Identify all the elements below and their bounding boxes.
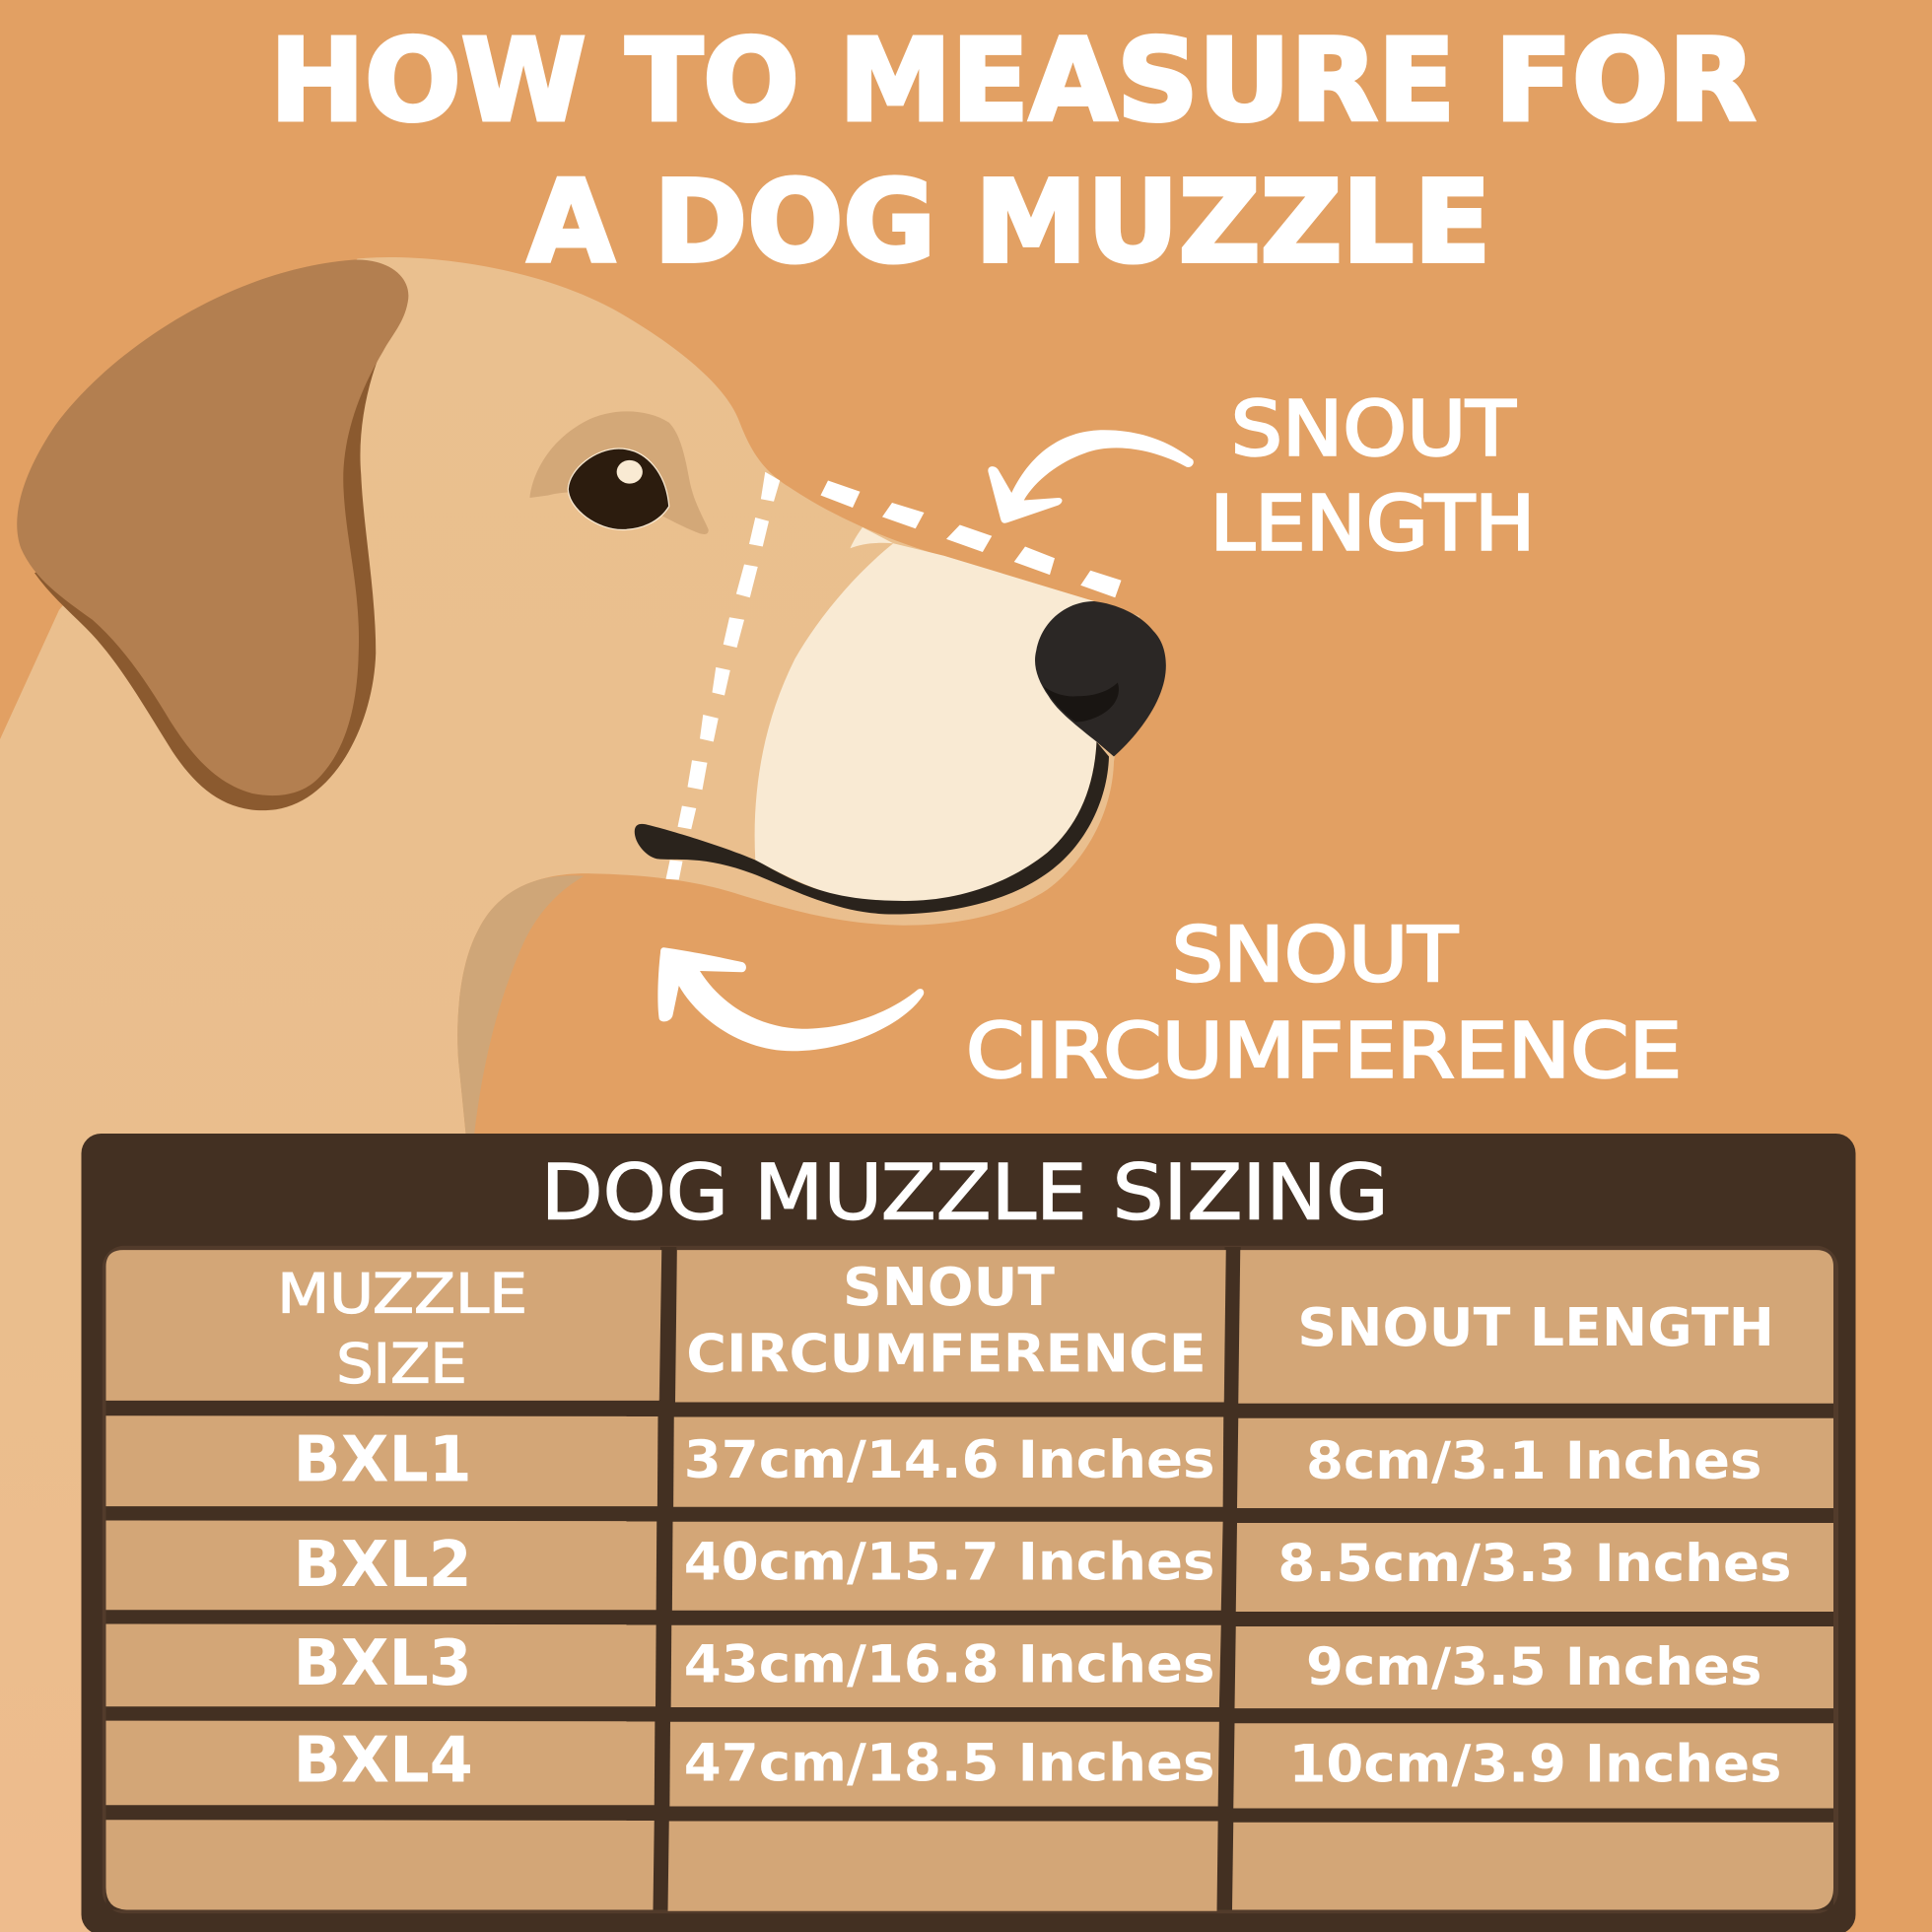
eye	[568, 448, 669, 530]
illustration: dog head in profile	[0, 257, 1166, 1932]
arrow: snout length	[988, 430, 1194, 523]
table cells	[106, 1250, 1833, 1911]
label: snout length: LENGTH	[1210, 480, 1536, 568]
ear	[17, 260, 408, 795]
label: snout circumference: CIRCUMFERENCE	[966, 1007, 1682, 1095]
header row: SNOUT	[843, 1256, 1055, 1318]
label: snout circumference	[966, 911, 1682, 1094]
label: snout length: SNOUT	[1231, 384, 1516, 472]
row: BXL1: BXL1	[294, 1423, 472, 1496]
table frame	[81, 1134, 1855, 1932]
mouth line	[635, 741, 1109, 915]
eye highlight	[617, 460, 643, 484]
row: BXL2: BXL2	[294, 1529, 472, 1602]
eye patch	[530, 411, 709, 534]
neck shadow	[457, 875, 584, 1134]
row: BXL2: 40cm/15.7 Inches	[684, 1532, 1214, 1592]
nostril shadow	[1044, 682, 1119, 722]
row: BXL4: BXL4	[294, 1724, 473, 1797]
title	[270, 15, 1756, 289]
label: snout length	[1210, 384, 1536, 568]
row: BXL1: 8cm/3.1 Inches	[1306, 1431, 1762, 1491]
label: snout circumference: SNOUT	[1172, 911, 1458, 999]
panel: sizing table	[81, 1134, 1855, 1932]
row: BXL2: 8.5cm/3.3 Inches	[1277, 1534, 1792, 1594]
title: HOW TO MEASURE FOR	[270, 15, 1756, 147]
arrow: snout circumference	[657, 947, 924, 1051]
title: A DOG MUZZLE	[527, 157, 1490, 289]
row: BXL3	[294, 1627, 1762, 1700]
row: BXL3: 43cm/16.8 Inches	[684, 1634, 1214, 1694]
row: BXL1: 37cm/14.6 Inches	[684, 1430, 1214, 1490]
row: BXL4: 10cm/3.9 Inches	[1289, 1734, 1782, 1794]
table inner edge	[103, 1246, 1838, 1913]
header row	[277, 1256, 1774, 1396]
muzzle cream patch	[755, 527, 1109, 906]
header row: CIRCUMFERENCE	[686, 1322, 1207, 1384]
table title: DOG MUZZLE SIZING	[541, 1148, 1389, 1237]
dashed line: snout circumference	[666, 472, 780, 879]
ear shadow	[34, 346, 383, 810]
header row: SIZE	[336, 1333, 467, 1396]
dashed line: snout length	[820, 481, 1122, 597]
nose	[1035, 601, 1166, 757]
row: BXL1	[294, 1423, 1762, 1496]
row: BXL2	[294, 1529, 1792, 1602]
row: BXL4	[294, 1725, 1782, 1797]
dog head and body	[0, 257, 1139, 1932]
row: BXL3: BXL3	[294, 1627, 472, 1700]
row: BXL4: 47cm/18.5 Inches	[684, 1733, 1214, 1793]
header row: SNOUT LENGTH	[1297, 1296, 1774, 1358]
header row: MUZZLE	[277, 1262, 527, 1325]
row: BXL3: 9cm/3.5 Inches	[1306, 1637, 1762, 1697]
